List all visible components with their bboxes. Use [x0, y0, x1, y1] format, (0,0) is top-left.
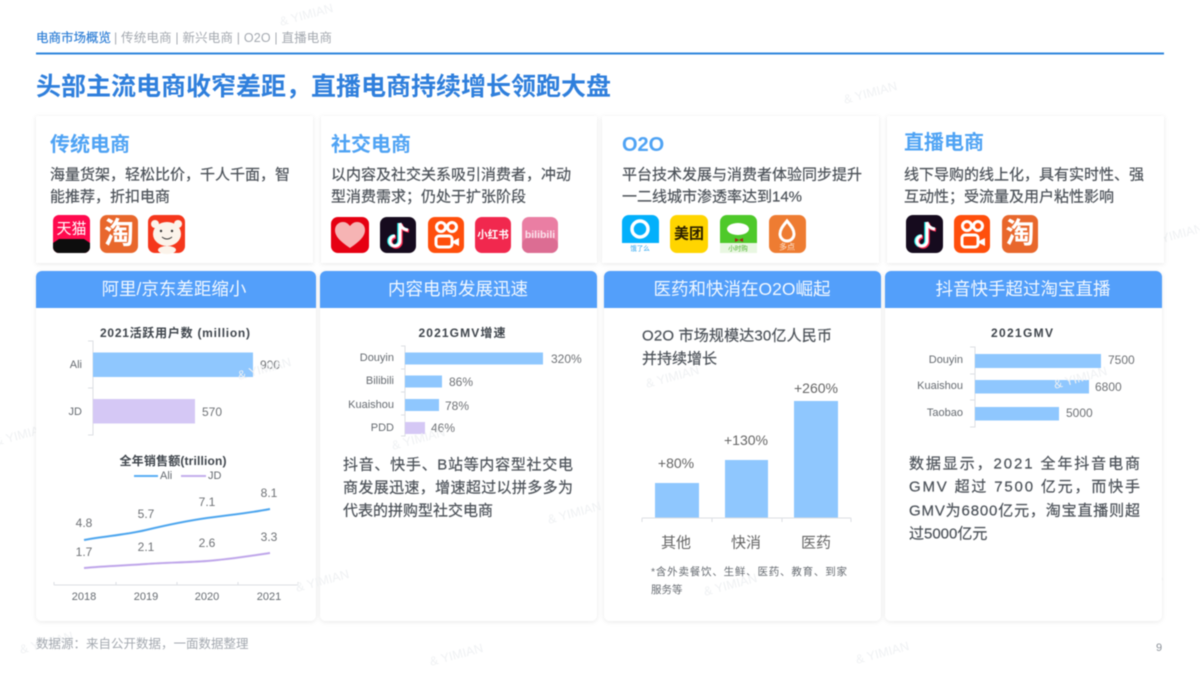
line chart: 全年销售额: Ali: [160, 470, 172, 482]
bar chart: 2021GMV: 6800: [1095, 380, 1122, 394]
watermarks: & YIMIAN: [181, 145, 238, 173]
icon: 美团: 美团: [674, 224, 704, 242]
description: 社交电商: [331, 166, 571, 206]
icon: 快手: [428, 217, 464, 253]
line chart: 全年销售额: 3.3: [261, 530, 278, 544]
watermarks over panels: & YIMIAN: [236, 355, 293, 383]
breadcrumb navigation: 电商市场概览: [36, 30, 111, 45]
breadcrumb navigation: | 传统电商 | 新兴电商 | O2O | 直播电商: [114, 30, 332, 45]
page number: 9: [1156, 642, 1162, 654]
line chart: 全年销售额: 2.6: [199, 536, 216, 550]
heading: 社交电商: 社交电商: [331, 132, 411, 156]
bar chart: 2021GMV: 2021GMV: [991, 326, 1053, 340]
column chart: 增速: +130%: [724, 432, 768, 448]
text block: GMV 数据: 数据显示，2021 全年抖音电商: [909, 454, 1140, 472]
panel: 抖音快手超过淘宝直播: [885, 271, 1162, 621]
source note: 数据源：来自公开数据，一面数据整理: [36, 636, 249, 651]
icon: 拼多多: [331, 217, 369, 253]
watermarks: & YIMIAN: [854, 639, 911, 667]
line chart: 全年销售额: 2020: [195, 591, 219, 603]
text block: 内容电商: 代表的拼购型社交电商: [343, 502, 493, 520]
icon: 京东到家: [720, 215, 757, 253]
bar chart: 2021GMV: 5000: [1066, 406, 1093, 420]
line chart: 全年销售额: 2.1: [138, 540, 155, 554]
panel: 直播电商: [887, 116, 1164, 263]
bar chart: 2021GMV: Douyin: [929, 354, 963, 366]
line chart: 全年销售额: JD: [208, 470, 222, 482]
column chart: 增速: 医药: [801, 534, 831, 552]
line chart: 全年销售额: [54, 453, 298, 603]
icon: 哔哩哔哩: [522, 217, 558, 253]
watermarks: & YIMIAN: [18, 629, 75, 657]
watermarks over panels: & YIMIAN: [546, 499, 603, 527]
panel: O2O: [602, 116, 879, 263]
line chart: 全年销售额: 全年销售额(trillion): [120, 453, 226, 468]
description: 传统电商: [50, 166, 290, 206]
watermarks: & YIMIAN: [1108, 569, 1165, 597]
band: 内容电商发展迅速: [320, 271, 597, 308]
bar chart: GMV增速: Bilibili: [366, 375, 394, 387]
footnote: 服务等: [651, 583, 683, 596]
icon: 抖音: [906, 215, 943, 253]
bar chart: GMV增速: PDD: [371, 422, 394, 434]
column chart: 增速: 其他: [661, 534, 691, 552]
text block: 内容电商: 商发展迅速，增速超过以拼多多为: [343, 480, 573, 496]
description: 传统电商: 海量货架，轻松比价，千人千面，智: [50, 166, 290, 184]
bar chart: 2021GMV: Taobao: [927, 407, 963, 419]
breadcrumb navigation: [36, 30, 332, 45]
footnote: *含外卖餐饮、生鲜、医药、教育、到家: [651, 565, 848, 578]
bar chart: 活跃用户数: Ali: [70, 359, 82, 371]
bar chart: GMV增速: Kuaishou: [348, 399, 394, 411]
icon: 饿了么: [622, 215, 659, 253]
text block: O2O 市场规模: 并持续增长: [642, 350, 717, 368]
line chart: 全年销售额: 4.8: [76, 516, 93, 530]
panel: 医药和快消在O2O崛起: [604, 271, 881, 621]
icon: 淘宝: [100, 215, 138, 253]
watermarks over panels: & YIMIAN: [702, 571, 759, 599]
watermarks: & YIMIAN: [1008, 154, 1065, 182]
text block: GMV 数据: 过5000亿元: [909, 526, 987, 542]
icon: 天猫: 天猫: [56, 220, 87, 238]
icon: 快手: [954, 215, 990, 253]
line chart: 全年销售额: 2019: [134, 591, 158, 603]
bar chart: 活跃用户数: 2021活跃用户数 (million): [100, 325, 250, 340]
band: 抖音快手超过淘宝直播: 抖音快手超过淘宝直播: [936, 279, 1111, 299]
column chart: 增速: +260%: [794, 380, 838, 396]
description: 社交电商: 型消费需求；仍处于扩张阶段: [331, 188, 526, 206]
header rule: [36, 52, 1164, 54]
bar chart: GMV增速: Douyin: [360, 352, 394, 364]
band: 医药和快消在O2O崛起: 医药和快消在O2O崛起: [654, 279, 830, 299]
panel: 传统电商: [36, 116, 313, 263]
description: O2O: 一二线城市渗透率达到14%: [622, 188, 802, 206]
icon: 淘宝: [1002, 215, 1038, 253]
heading: 传统电商: 传统电商: [50, 132, 130, 156]
footnote: [651, 565, 848, 596]
bar chart: GMV增速: 86%: [449, 375, 473, 389]
icon: 饿了么: 饿了么: [630, 244, 650, 252]
bar chart: GMV增速: 320%: [551, 352, 582, 366]
icon: 淘宝: 淘: [1005, 217, 1035, 250]
icon: 京东: [148, 215, 185, 254]
panel: 内容电商发展迅速: [320, 271, 597, 621]
bar chart: GMV增速: 46%: [431, 421, 455, 435]
bar chart: GMV增速: [348, 325, 582, 436]
bar chart: 2021GMV: 7500: [1108, 353, 1135, 367]
bar chart: GMV增速: 2021GMV增速: [418, 325, 506, 340]
icon: 多点: [769, 215, 806, 253]
heading: O2O: O2O: [622, 134, 664, 156]
panel: 阿里/京东差距缩小: [36, 271, 316, 621]
bar chart: 活跃用户数: [69, 325, 280, 435]
text block: GMV 数据: GMV为6800亿元，淘宝直播则超: [909, 502, 1140, 520]
text block: GMV 数据: GMV 超过 7500 亿元，而快手: [909, 478, 1140, 496]
watermarks over panels: [236, 355, 1109, 599]
line chart: 全年销售额: 8.1: [261, 486, 278, 500]
text block: 内容电商: 抖音、快手、B站等内容型社交电: [343, 456, 573, 474]
icon: 多点: 多点: [779, 242, 795, 252]
description: 直播电商: 互动性；受流量及用户粘性影响: [904, 188, 1114, 206]
bar chart: 活跃用户数: 570: [202, 405, 222, 419]
heading: 直播电商: 直播电商: [904, 131, 984, 154]
icon: 小红书: 小红书: [477, 228, 509, 241]
column chart: 增速: 快消: [731, 534, 761, 552]
line chart: 全年销售额: 2021: [257, 591, 281, 603]
text block: GMV 数据: [909, 454, 1140, 542]
line chart: 全年销售额: 5.7: [138, 507, 155, 521]
watermarks: & YIMIAN: [428, 641, 485, 669]
icon: 美团: [670, 215, 708, 253]
text block: O2O 市场规模: O2O 市场规模达30亿人民币: [642, 328, 832, 344]
bar chart: 2021GMV: [917, 326, 1135, 427]
icon: 抖音: [380, 217, 416, 253]
watermarks over panels: & YIMIAN: [644, 363, 701, 391]
icon: 小红书: [475, 217, 511, 253]
line chart: 全年销售额: 7.1: [199, 495, 216, 509]
description: O2O: 平台技术发展与消费者体验同步提升: [622, 166, 862, 184]
line chart: 全年销售额: 1.7: [76, 545, 93, 559]
column chart: 增速: [642, 380, 851, 552]
description: 社交电商: 以内容及社交关系吸引消费者，冲动: [331, 166, 571, 184]
band: 阿里/京东差距缩小: [36, 271, 316, 308]
band: 内容电商发展迅速: 内容电商发展迅速: [388, 279, 528, 299]
bar chart: 活跃用户数: JD: [69, 406, 82, 418]
watermarks over panels: & YIMIAN: [390, 425, 447, 453]
text block: O2O 市场规模: [642, 328, 832, 368]
panel: 社交电商: [321, 116, 597, 263]
watermarks over panels: & YIMIAN: [1052, 364, 1109, 392]
icon: 京东到家: 小时购: [728, 244, 748, 252]
text block: 内容电商: [343, 456, 573, 520]
band: 阿里/京东差距缩小: 阿里/京东差距缩小: [102, 279, 247, 299]
bar chart: GMV增速: 78%: [445, 399, 469, 413]
description: 直播电商: 线下导购的线上化，具有实时性、强: [904, 166, 1144, 184]
watermarks over panels: & YIMIAN: [294, 567, 351, 595]
band: 医药和快消在O2O崛起: [604, 271, 881, 308]
watermarks: & YIMIAN: [842, 79, 899, 107]
icon: 哔哩哔哩: bilibili: [525, 229, 555, 241]
bar chart: 活跃用户数: 900: [260, 358, 280, 372]
title: 头部主流电商收窄差距，直播电商持续增长领跑大盘: [36, 72, 611, 101]
description: 直播电商: [904, 166, 1144, 206]
line chart: 全年销售额: 2018: [72, 591, 96, 603]
band: 抖音快手超过淘宝直播: [885, 271, 1162, 308]
description: 传统电商: 能推荐，折扣电商: [50, 188, 170, 206]
bar chart: 2021GMV: Kuaishou: [917, 380, 963, 392]
icon: 淘宝: 淘: [104, 218, 134, 250]
icon: 天猫: [53, 215, 90, 253]
column chart: 增速: +80%: [658, 455, 694, 471]
watermarks: & YIMIAN: [278, 1, 335, 29]
description: O2O: [622, 166, 862, 206]
